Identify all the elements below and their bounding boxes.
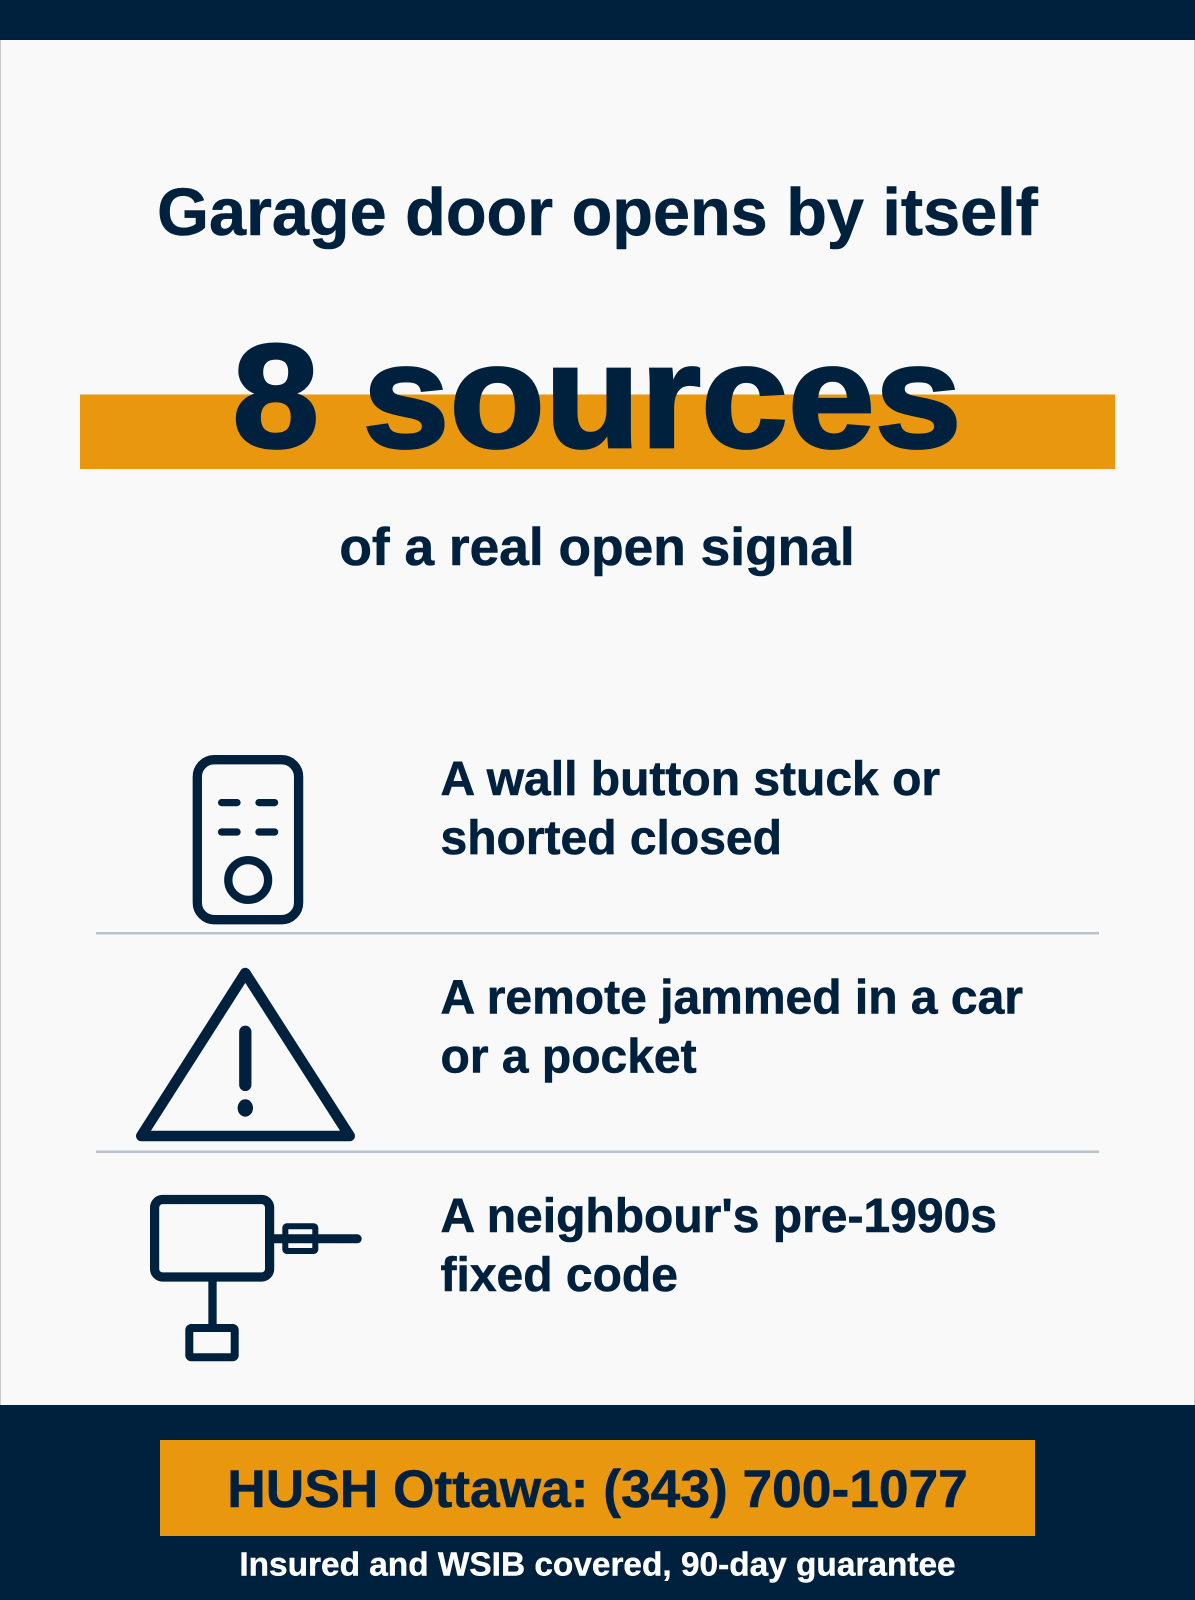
icon: warning triangle bbox=[141, 973, 350, 1136]
subtitle: of a real open signal bbox=[339, 518, 855, 577]
hero heading: 8 sources: 8 sources bbox=[232, 314, 962, 479]
guarantee line: Insured and WSIB covered, 90-day guarantee bbox=[239, 1546, 956, 1584]
item text: wall button: A wall button stuck or bbox=[440, 753, 940, 806]
item text: remote: A remote jammed in a car bbox=[440, 972, 1023, 1024]
item text: remote: or a pocket bbox=[440, 1030, 697, 1084]
footer band bbox=[0, 1405, 1195, 1600]
item 1: wall button bbox=[197, 753, 940, 920]
phone call-to-action bbox=[160, 1440, 1035, 1536]
item 3: neighbour's code bbox=[155, 1190, 997, 1357]
icon: opener with antenna bbox=[155, 1200, 357, 1357]
phone call-to-action: HUSH Ottawa: (343) 700-1077 bbox=[227, 1460, 968, 1519]
title: Garage door opens by itself bbox=[157, 176, 1039, 250]
top band bbox=[0, 0, 1195, 40]
icon: wall button bbox=[197, 760, 299, 920]
item text: wall button: shorted closed bbox=[440, 812, 782, 865]
hero highlight bar bbox=[80, 394, 1115, 469]
item text: neighbour's code: fixed code bbox=[440, 1249, 678, 1302]
item text: neighbour's code: A neighbour's pre-1990s bbox=[440, 1190, 997, 1243]
item 2: remote bbox=[141, 972, 1023, 1136]
